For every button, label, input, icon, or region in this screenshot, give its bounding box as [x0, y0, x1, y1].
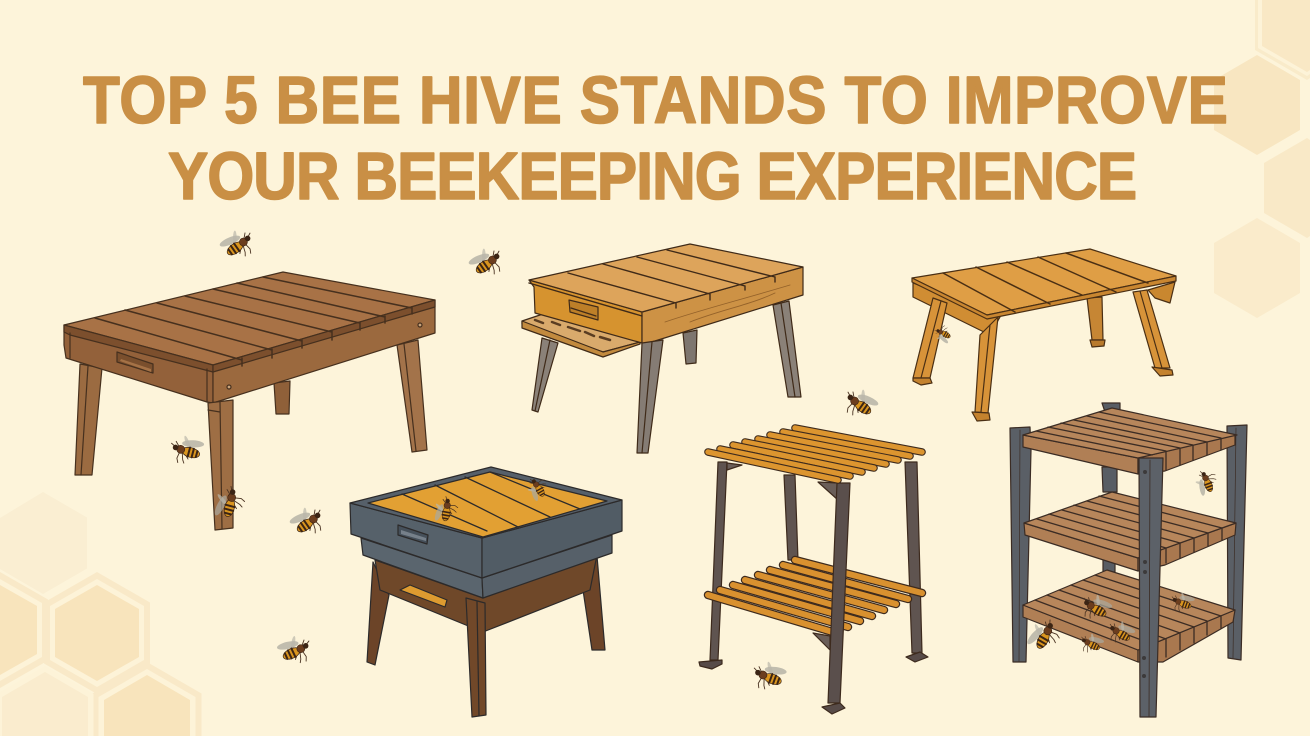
- back leg: [784, 475, 798, 560]
- left post: [1010, 427, 1031, 662]
- front apron: [913, 283, 1000, 335]
- front leg: [466, 598, 486, 717]
- brackets: [727, 463, 838, 650]
- middle shelf: [1024, 492, 1236, 571]
- back leg: [683, 330, 697, 364]
- back leg: [1087, 297, 1105, 347]
- left leg: [75, 364, 102, 475]
- brown apron: [375, 555, 597, 632]
- bee near stand 1 top: [217, 223, 260, 266]
- bee beside stand 6: [1192, 467, 1221, 497]
- top surface: [912, 249, 1176, 315]
- left leg: [367, 562, 389, 665]
- front leg: [822, 483, 850, 714]
- bee on stand 6 lower shelf right: [1168, 589, 1196, 616]
- lower shelf slats: [708, 560, 922, 633]
- bolts: [227, 323, 422, 389]
- front leg: [208, 400, 233, 530]
- right apron: [1148, 282, 1175, 303]
- front post: [1139, 458, 1163, 717]
- bee on blue hive top left: [432, 495, 459, 525]
- stand 6: three-tier shelf with dark posts: [1010, 403, 1247, 717]
- upper box right face: [482, 500, 622, 578]
- top lip: [912, 276, 1176, 319]
- bee beside blue hive: [287, 500, 330, 543]
- right apron: [213, 300, 435, 403]
- honeycomb cluster: top right: [1214, 0, 1310, 318]
- bee on stand 3 leg: [932, 323, 955, 345]
- bee below blue hive: [274, 630, 316, 670]
- left apron: [64, 325, 213, 403]
- tool shelf: [522, 314, 640, 357]
- top surface: [529, 244, 803, 312]
- right leg: [397, 340, 427, 452]
- top shelf: [1023, 408, 1237, 474]
- bee on stand 6 lower shelf front: [1103, 616, 1137, 649]
- stand 3: angled leg orange table: [912, 249, 1176, 421]
- left leg: [699, 462, 727, 669]
- back leg: [274, 381, 290, 414]
- title: TOP 5 BEE HIVE STANDS TO IMPROVE: [83, 62, 1228, 138]
- yellow top: [368, 472, 607, 537]
- title: [83, 62, 1228, 214]
- grain: [665, 285, 790, 322]
- lower box: [361, 535, 612, 598]
- right leg: [905, 462, 928, 662]
- top surface: [64, 272, 435, 365]
- stand 2: tan table with tool shelf: [522, 244, 803, 453]
- stand 1: brown plank table: [64, 272, 435, 530]
- left face: [529, 280, 642, 343]
- upper box left face: [350, 503, 482, 578]
- handle: [117, 352, 153, 373]
- plank seams: [95, 277, 412, 366]
- right post: [1227, 425, 1247, 660]
- top lip: [64, 325, 213, 372]
- title: YOUR BEEKEEPING EXPERIENCE: [168, 138, 1137, 214]
- bee above stand 2: [466, 241, 509, 284]
- yellow slot: [400, 585, 447, 607]
- bee below stand 5: [748, 657, 789, 695]
- bee on blue hive top right: [523, 473, 552, 503]
- front leg: [637, 340, 663, 453]
- bee on stand 6 lower shelf edge: [1077, 630, 1106, 657]
- stand 4: blue hive box on brown stand: [350, 467, 622, 717]
- handle: [569, 300, 598, 320]
- plank seams: [529, 250, 775, 316]
- bee near stand 1 leg: [167, 432, 206, 468]
- back post: [1102, 403, 1120, 572]
- plank seams: [402, 472, 580, 531]
- top shelf slats: [708, 428, 922, 480]
- left leg: [913, 298, 947, 385]
- stand 5: slatted two-tier stand: [699, 428, 928, 714]
- front leg: [972, 317, 998, 421]
- right face: [642, 267, 803, 345]
- honeycomb cluster: bottom left: [0, 492, 202, 736]
- right leg: [1133, 290, 1173, 376]
- bee on stand 6 lower shelf left: [1024, 614, 1065, 657]
- bee near stand 5 top: [838, 382, 881, 425]
- handle: [398, 525, 428, 544]
- plank seams: [943, 253, 1148, 312]
- left leg: [532, 338, 558, 412]
- corner post line: [70, 333, 207, 402]
- bee on stand 6 lower shelf centre: [1076, 589, 1115, 626]
- back leg: [583, 556, 605, 650]
- right leg: [773, 301, 801, 397]
- rim: [350, 467, 622, 538]
- lower shelf: [1023, 570, 1235, 662]
- bee on stand 1 front leg: [211, 483, 247, 522]
